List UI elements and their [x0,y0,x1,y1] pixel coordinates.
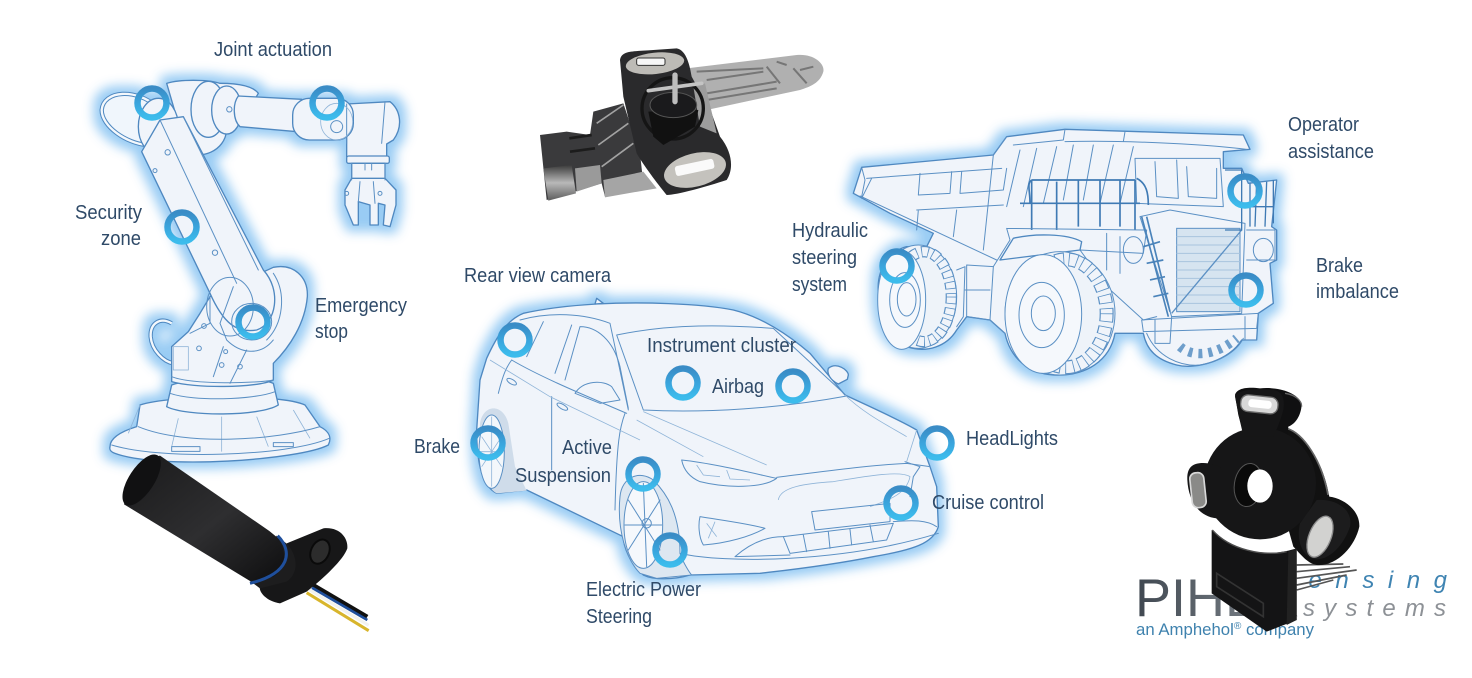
label: brake imbalance [1316,254,1399,303]
label: joint actuation: Joint actuation [214,38,332,61]
label: headlights: HeadLights [966,427,1058,450]
label: active suspension: Suspension [515,464,611,487]
ring: instrument cluster [668,368,698,398]
panel: mining truck [792,113,1399,375]
ring: cruise control [886,488,916,518]
label: brake imbalance: imbalance [1316,280,1399,303]
label: emergency stop [315,294,408,343]
label: security zone: Security [75,201,143,224]
ring: robot base joint [238,308,268,336]
label: operator assistance: assistance [1288,140,1374,163]
label: hydraulic steering system: Hydraulic [792,219,868,242]
ring: robot wrist [312,88,342,118]
label: brake: Brake [414,435,460,458]
label: cruise control: Cruise control [932,491,1044,514]
truck line details [860,129,1275,375]
logo wordmark: PIHER [1135,569,1300,628]
car illustration [477,298,938,579]
logo tagline: company [1241,621,1315,639]
product: crankshaft speed sensor [115,449,369,631]
product: lever position sensor [540,48,823,201]
label: airbag: Airbag [712,375,764,398]
ring: electric power steering [656,536,684,564]
ring: brake [474,428,502,458]
label: operator assistance [1288,113,1374,163]
label: hydraulic steering system: system [792,273,847,296]
label: active suspension: Active [562,436,612,459]
ring: rear view camera [500,326,530,354]
panel: car [414,264,1058,628]
robot line details [112,102,385,454]
truck illustration [853,129,1277,375]
label: hydraulic steering system: steering [792,246,857,269]
logo: PIHER sensing systems [1135,567,1448,639]
label: electric power steering: Electric Power [586,578,701,601]
label: operator assistance: Operator [1288,113,1359,136]
ring: operator assistance [1230,176,1260,206]
label: emergency stop: Emergency [315,294,408,317]
ring: robot shoulder [138,88,166,118]
ring: hydraulic steering [882,252,912,280]
ring: brake imbalance [1232,276,1260,304]
ring: active suspension [628,460,658,488]
logo word: sensing: sensing [1283,567,1448,594]
label: instrument cluster: Instrument cluster [647,334,796,357]
ring: headlights [922,428,952,458]
logo tagline: an Amphehol [1136,621,1232,639]
label: electric power steering: Steering [586,605,652,628]
robot illustration [102,80,400,462]
ring: airbag [778,372,808,400]
label: hydraulic steering system [792,219,868,296]
label: electric power steering [586,578,701,628]
ring: robot arm [168,212,196,242]
label: active suspension [515,436,612,487]
label: security zone: zone [101,227,141,250]
label: brake imbalance: Brake [1316,254,1363,277]
logo word: systems: systems [1303,595,1446,622]
product: rotary position sensor [1187,388,1359,632]
panel: robot arm [75,38,408,462]
car line details [479,315,938,578]
logo tagline: ® [1234,621,1242,632]
label: rear view camera: Rear view camera [464,264,612,287]
label: security zone [75,201,143,250]
label: emergency stop: stop [315,320,348,343]
